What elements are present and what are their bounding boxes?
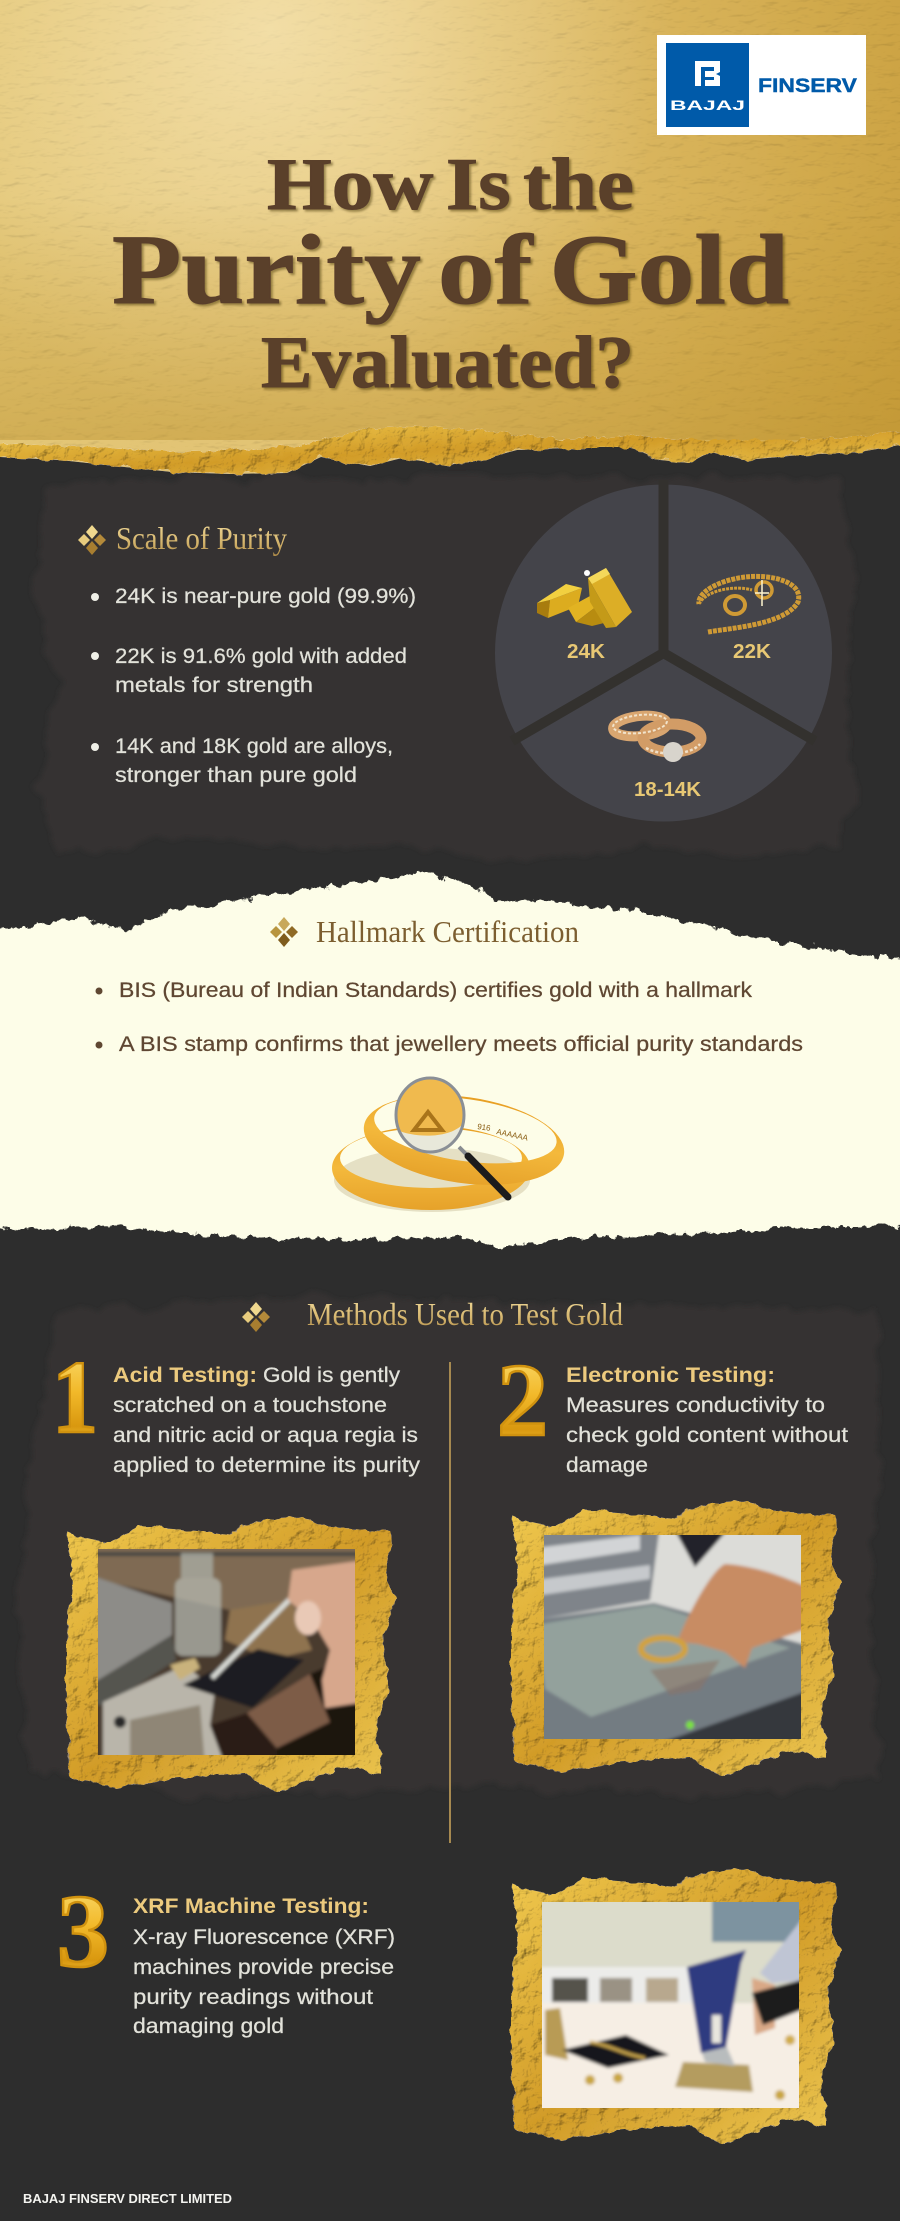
photo: electronic gold tester — [544, 1535, 801, 1739]
heading: scale of purity: Scale of Purity — [116, 520, 287, 556]
label 18-14K: 18-14K — [634, 779, 702, 801]
icon: gold necklace and ring — [699, 576, 799, 632]
gold foil surface — [0, 0, 900, 474]
gold leaf frame — [66, 1517, 396, 1792]
gold leaf frame — [511, 1501, 841, 1776]
photo frame: acid testing — [66, 1517, 396, 1792]
heading: methods used to test gold: Methods Used to Test Gold — [307, 1296, 623, 1332]
logo word FINSERV: FINSERV — [758, 76, 857, 97]
icon: bangles with magnifying glass: AAAAAA — [496, 1127, 529, 1143]
icon: diamond rings — [612, 712, 701, 762]
text block: purity bullets: metals for strength — [115, 674, 313, 697]
text block: XRF machine testing: XRF Machine Testing: — [133, 1895, 369, 1918]
number 1: 1 — [52, 1340, 98, 1455]
icon: bangles with magnifying glass: 916 — [477, 1122, 492, 1133]
title: How Is the — [267, 144, 634, 226]
torn crumpled foil edge — [0, 426, 900, 474]
footer text: BAJAJ FINSERV DIRECT LIMITED — [23, 2191, 232, 2206]
photo frame: electronic testing — [511, 1501, 841, 1776]
icon: bangles with magnifying glass — [332, 1078, 570, 1212]
text block: XRF machine testing: X-ray Fluorescence (XRF) — [133, 1926, 395, 1949]
panel: parchment behind scale of purity — [34, 478, 856, 862]
icon: diamond ornament scale of purity — [78, 525, 106, 555]
text block: electronic testing: damage — [566, 1454, 648, 1477]
photo: acid test on touchstone — [98, 1549, 355, 1755]
text block: XRF machine testing: damaging gold — [133, 2015, 284, 2038]
number 2: 2 — [497, 1343, 548, 1458]
panel: header gold foil — [0, 0, 900, 474]
text block: acid testing: applied to determine its purity — [113, 1454, 421, 1477]
text block: electronic testing — [566, 1364, 848, 1477]
label 22K: 22K — [733, 641, 772, 663]
logo word BAJAJ: BAJAJ — [670, 97, 745, 113]
photo: XRF analyser — [542, 1902, 799, 2108]
text block: acid testing: scratched on a touchstone — [113, 1394, 387, 1417]
logo BF mark — [695, 61, 720, 86]
foil shading — [0, 0, 900, 440]
logo blue square — [666, 43, 749, 127]
text block: hallmark bullets — [96, 979, 803, 1056]
title: Purity of Gold — [112, 214, 789, 325]
text block: electronic testing: Electronic Testing: — [566, 1364, 775, 1387]
photo frame: XRF machine testing — [511, 1869, 841, 2144]
text block: acid testing — [113, 1364, 421, 1477]
column divider — [449, 1362, 451, 1843]
text block: purity bullets — [91, 585, 416, 787]
logo: Bajaj Finserv — [657, 35, 866, 135]
text block: purity bullets: stronger than pure gold — [115, 764, 357, 787]
text block: XRF machine testing: purity readings without — [133, 1986, 373, 2009]
label 24K: 24K — [567, 641, 606, 663]
icon: diamond ornament methods — [242, 1302, 270, 1332]
text block: purity bullets: 22K is 91.6% gold with added — [115, 645, 407, 668]
foil highlight — [0, 0, 900, 440]
text block: electronic testing: check gold content without — [566, 1424, 848, 1447]
icon: diamond ornament hallmark — [270, 917, 298, 947]
heading: hallmark certification: Hallmark Certification — [316, 914, 579, 949]
text block: XRF machine testing — [133, 1895, 395, 2038]
text block: purity bullets: 14K and 18K gold are alloys, — [115, 735, 393, 758]
text block: acid testing: and nitric acid or aqua regia is — [113, 1424, 418, 1447]
title — [112, 144, 789, 404]
cream torn sheet — [0, 873, 900, 1248]
text block: hallmark bullets: BIS (Bureau of Indian Standards) certifies gold with a hallmark — [119, 979, 753, 1002]
icon: gold bars — [537, 568, 632, 628]
panel: hallmark certification cream band — [0, 873, 900, 1248]
text block: electronic testing: Measures conductivity to — [566, 1394, 825, 1417]
number 3: 3 — [57, 1874, 109, 1989]
text block: acid testing: Gold is gently — [263, 1364, 401, 1387]
gold leaf frame — [511, 1869, 841, 2144]
text block: hallmark bullets: A BIS stamp confirms that jewellery meets official purity standards — [119, 1033, 803, 1056]
title: Evaluated? — [261, 322, 634, 404]
text block: purity bullets: 24K is near-pure gold (99.9%) — [115, 585, 416, 608]
text block: acid testing: Acid Testing: — [113, 1364, 257, 1387]
panel: parchment behind test methods — [18, 1296, 880, 1798]
text block: XRF machine testing: machines provide precise — [133, 1956, 394, 1979]
chart: karat pie — [495, 480, 832, 822]
magnifying glass — [396, 1078, 508, 1197]
